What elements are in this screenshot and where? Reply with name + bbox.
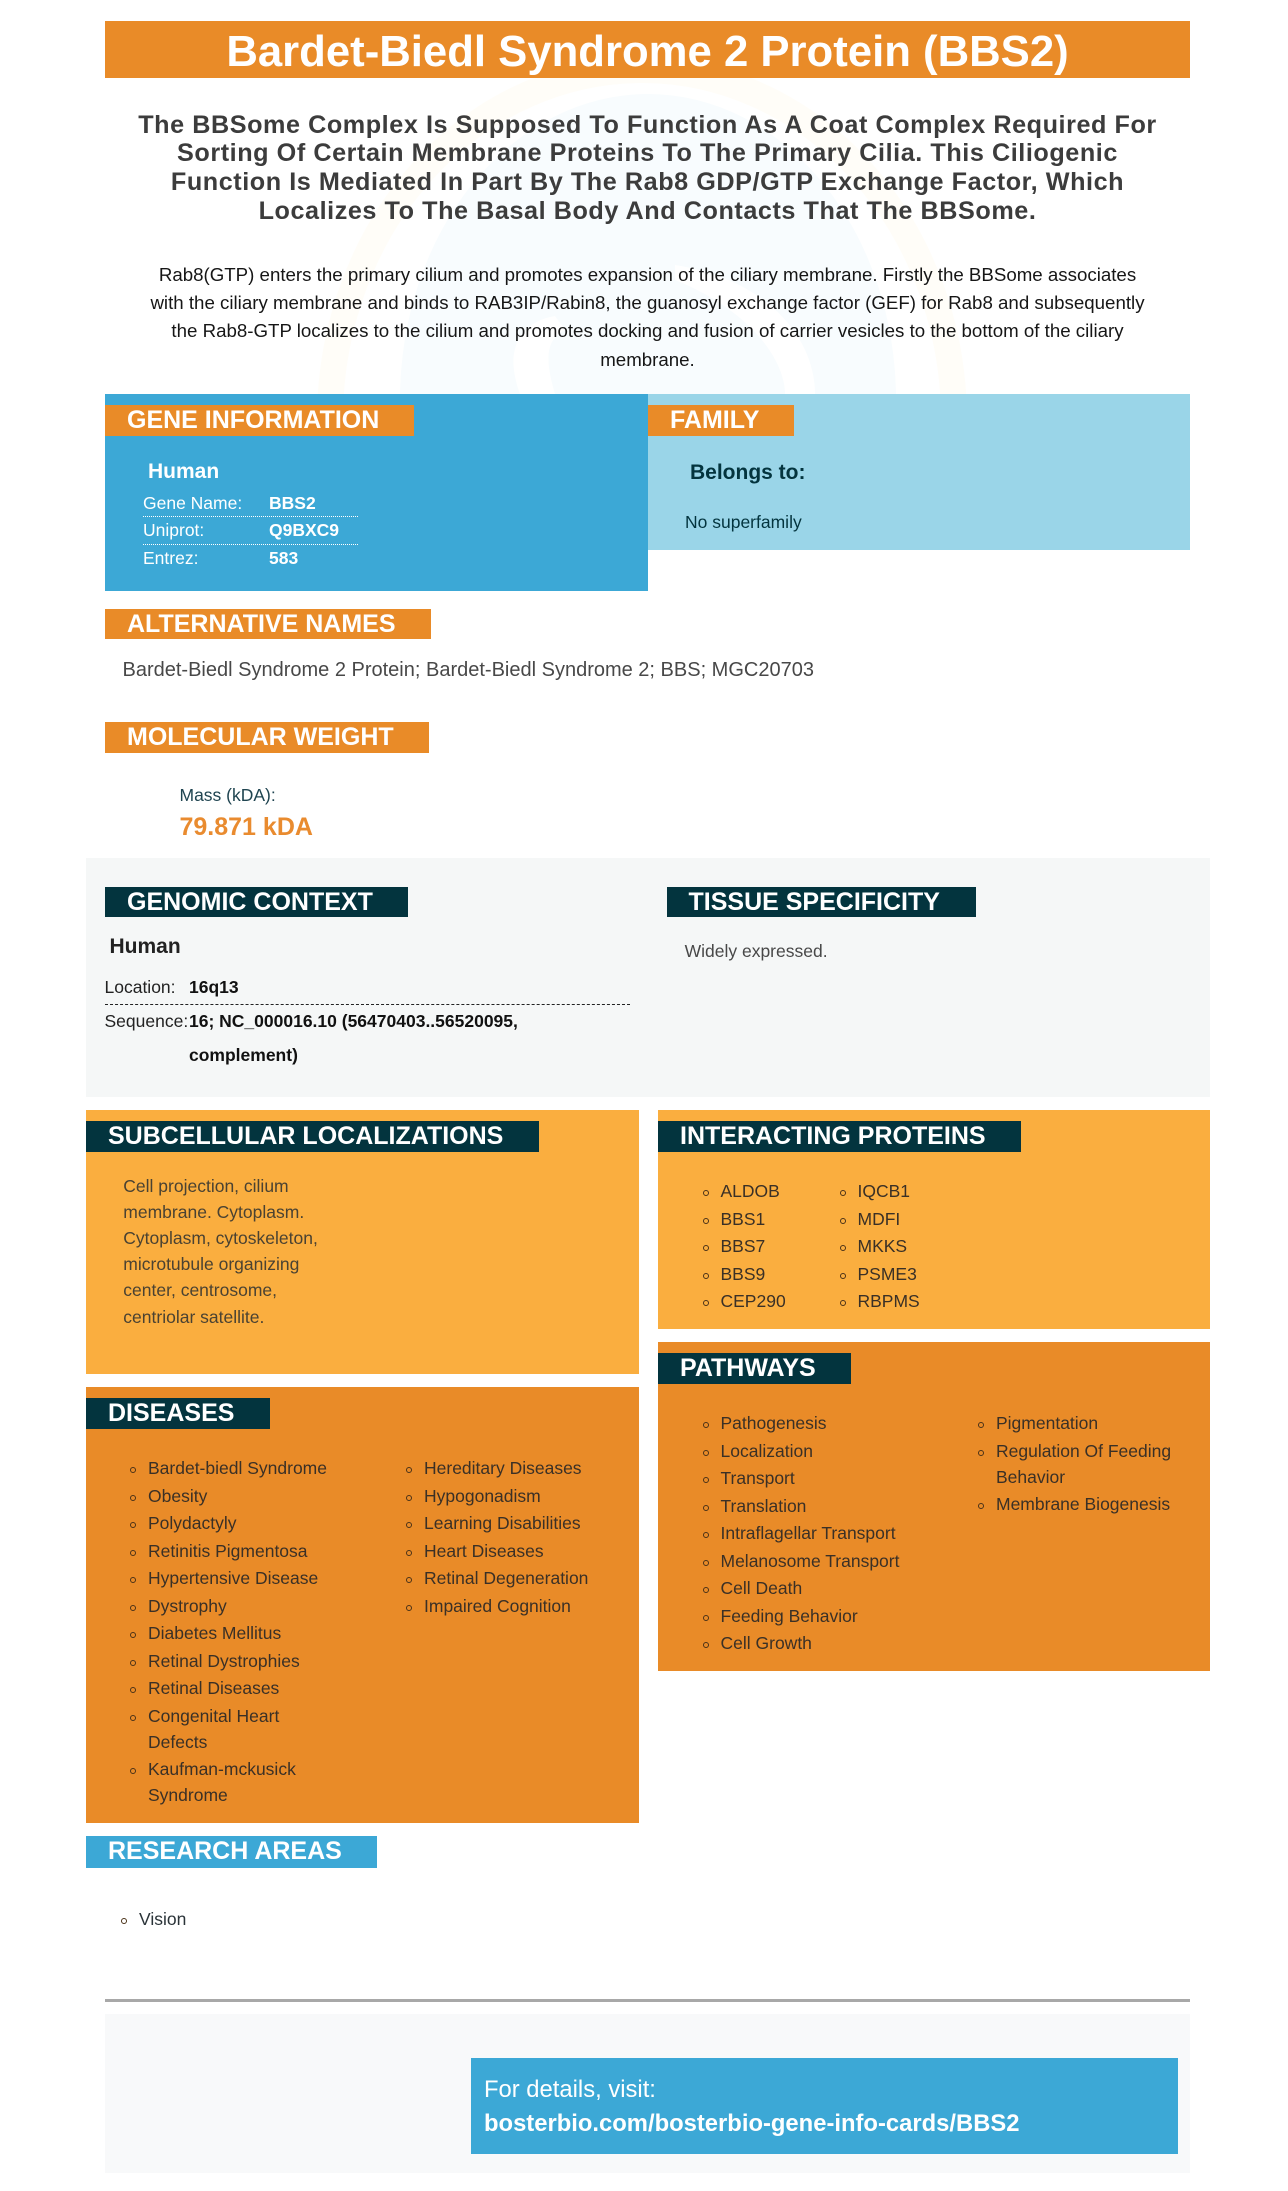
disease list: Syndrome [148, 1785, 228, 1805]
subtitle heading: Function Is Mediated In Part By The Rab8 GDP/GTP Exchange Factor, Which [171, 168, 1124, 196]
protein list: PSME3 [858, 1264, 917, 1284]
protein list: BBS7 [720, 1236, 765, 1256]
pathway list: Intraflagellar Transport [720, 1523, 896, 1543]
heading: diseases [86, 1398, 270, 1429]
disease list: Diabetes Mellitus [148, 1623, 281, 1643]
heading: family: FAMILY [670, 406, 759, 434]
disease list: Kaufman-mckusick [148, 1759, 296, 1779]
family value: No superfamily [685, 512, 802, 532]
panel: subcellular localizations [86, 1110, 638, 1374]
disease list: Heart Diseases [424, 1540, 544, 1560]
callout: details link [471, 2058, 1178, 2154]
disease list: Hypertensive Disease [148, 1568, 318, 1588]
disease list: Defects [148, 1732, 207, 1752]
location row: Location: [104, 977, 176, 997]
pathway list: Membrane Biogenesis [996, 1494, 1170, 1514]
subtitle heading: Localizes To The Basal Body And Contacts That The BBSome. [259, 197, 1036, 225]
gene details table: Gene Name: [143, 493, 242, 513]
pathway list [703, 1413, 1171, 1653]
species label: Human [110, 935, 181, 958]
footer panel [105, 2014, 1190, 2173]
panel: diseases [86, 1387, 638, 1823]
pathway list: Melanosome Transport [720, 1550, 899, 1570]
description paragraph: with the ciliary membrane and binds to RAB3IP/Rabin8, the guanosyl exchange factor (GEF) for Rab8 and subsequently [150, 292, 1145, 313]
panel: genomic context and tissue specificity: 16; NC_000016.10 (56470403..56520095, [189, 1011, 518, 1031]
localization text: Cell projection, cilium [123, 1176, 289, 1196]
heading: molecular weight: MOLECULAR WEIGHT [127, 723, 394, 751]
heading: alternative names: ALTERNATIVE NAMES [127, 610, 396, 638]
disease list: Retinitis Pigmentosa [148, 1540, 308, 1560]
description paragraph: Rab8(GTP) enters the primary cilium and promotes expansion of the ciliary membrane. Firstly the BBSome associates [159, 264, 1136, 285]
localization text: membrane. Cytoplasm. [123, 1202, 304, 1222]
pathway list: Transport [720, 1468, 795, 1488]
protein list: MKKS [858, 1236, 907, 1256]
localization text: microtubule organizing [123, 1254, 299, 1274]
molecular weight value: 79.871 kDA [180, 813, 313, 841]
subtitle heading: Sorting Of Certain Membrane Proteins To The Primary Cilia. This Ciliogenic [177, 139, 1118, 167]
disease list: Impaired Cognition [424, 1596, 571, 1616]
disease list [130, 1458, 588, 1805]
panel: genomic context and tissue specificity: 16q13 [189, 977, 239, 997]
disease list: Dystrophy [148, 1596, 227, 1616]
disease list: Retinal Diseases [148, 1678, 279, 1698]
subtitle heading [138, 110, 1157, 225]
callout: details link: For details, visit: [484, 2076, 656, 2102]
disease list: Bardet-biedl Syndrome [148, 1458, 327, 1478]
gene details table: BBS2 [269, 493, 316, 513]
gene details table: Entrez: [143, 548, 198, 568]
disease list: Retinal Degeneration [424, 1568, 588, 1588]
pathway list: Feeding Behavior [720, 1606, 858, 1626]
pathway list: Pigmentation [996, 1413, 1098, 1433]
divider [105, 1999, 1190, 2002]
panel: genomic context and tissue specificity [86, 858, 1210, 1097]
gene details table: Q9BXC9 [269, 520, 339, 540]
localization text [123, 1176, 318, 1327]
heading: gene information: GENE INFORMATION [127, 406, 379, 434]
protein list: CEP290 [720, 1291, 786, 1311]
sequence row: Sequence: [104, 1011, 188, 1031]
heading: research areas: RESEARCH AREAS [108, 1837, 342, 1865]
pathway list: Cell Growth [720, 1633, 812, 1653]
species label: Human [148, 460, 219, 483]
disease list: Congenital Heart [148, 1706, 279, 1726]
heading: tissue specificity: TISSUE SPECIFICITY [688, 888, 940, 916]
protein list: BBS9 [720, 1264, 765, 1284]
panel: pathways [658, 1342, 1210, 1671]
subtitle heading: The BBSome Complex Is Supposed To Function As A Coat Complex Required For [138, 110, 1157, 138]
protein list: IQCB1 [858, 1181, 910, 1201]
pathway list: Cell Death [720, 1578, 802, 1598]
disease list: Hypogonadism [424, 1486, 541, 1506]
description paragraph [150, 264, 1145, 370]
panel: family [648, 394, 1190, 550]
heading: genomic context: GENOMIC CONTEXT [127, 888, 373, 916]
heading: pathways [658, 1353, 851, 1384]
heading: subcellular localizations: SUBCELLULAR LOCALIZATIONS [108, 1122, 503, 1150]
protein list [703, 1181, 920, 1311]
panel: interacting proteins [658, 1110, 1210, 1329]
description paragraph: the Rab8-GTP localizes to the cilium and promotes docking and fusion of carrier vesicles to the bottom of the ciliary [171, 320, 1124, 341]
watermark background [0, 78, 1288, 394]
gene details table: 583 [269, 548, 298, 568]
disease list: Obesity [148, 1486, 207, 1506]
tissue specificity text: Widely expressed. [685, 940, 828, 960]
belongs to label: Belongs to: [690, 461, 806, 484]
heading: interacting proteins: INTERACTING PROTEINS [680, 1122, 986, 1150]
pathway list: Regulation Of Feeding [996, 1440, 1171, 1460]
gene details table: Uniprot: [143, 520, 204, 540]
protein list: MDFI [858, 1209, 900, 1229]
gene details table [143, 493, 358, 568]
pathway list: Localization [720, 1440, 813, 1460]
pathway list: Pathogenesis [720, 1413, 827, 1433]
molecular weight value: Mass (kDA): [180, 785, 276, 805]
title [105, 21, 1190, 78]
panel: genomic context and tissue specificity: complement) [189, 1045, 298, 1065]
protein list: ALDOB [720, 1181, 780, 1201]
disease list: Hereditary Diseases [424, 1458, 582, 1478]
research areas list: Vision [139, 1909, 186, 1929]
pathway list: Behavior [996, 1467, 1065, 1487]
disease list: Retinal Dystrophies [148, 1650, 300, 1670]
protein list: BBS1 [720, 1209, 765, 1229]
callout: details link: bosterbio.com/bosterbio-gene-info-cards/BBS2 [484, 2110, 1020, 2137]
pathway list: Translation [720, 1496, 806, 1516]
description paragraph: membrane. [600, 349, 695, 370]
disease list: Polydactyly [148, 1513, 237, 1533]
disease list: Learning Disabilities [424, 1513, 581, 1533]
localization text: centriolar satellite. [123, 1307, 264, 1327]
panel: gene information [105, 394, 648, 591]
heading: diseases: DISEASES [108, 1399, 234, 1427]
localization text: center, centrosome, [123, 1280, 277, 1300]
protein list: RBPMS [858, 1291, 920, 1311]
alternative names text: Bardet-Biedl Syndrome 2 Protein; Bardet-Biedl Syndrome 2; BBS; MGC20703 [122, 659, 814, 681]
title: Bardet-Biedl Syndrome 2 Protein (BBS2) [226, 27, 1069, 76]
molecular weight value [180, 785, 313, 841]
localization text: Cytoplasm, cytoskeleton, [123, 1228, 318, 1248]
heading: family [648, 405, 794, 436]
heading: pathways: PATHWAYS [680, 1354, 816, 1382]
